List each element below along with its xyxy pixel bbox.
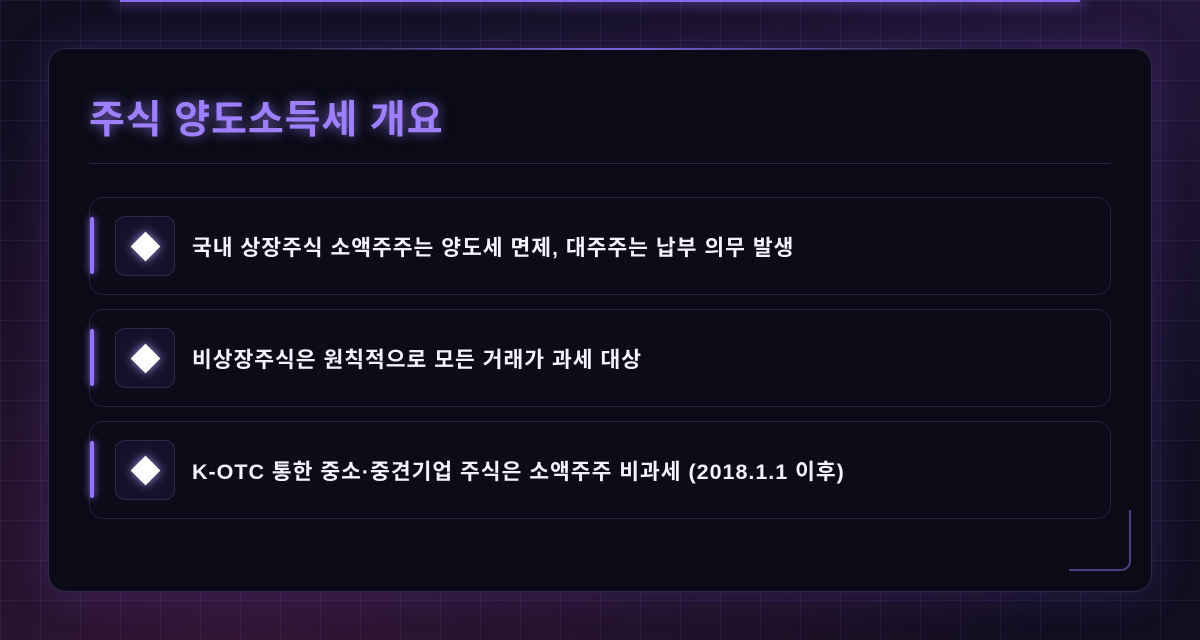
text 2: 비상장주식은 원칙적으로 모든 거래가 과세 대상 — [192, 348, 642, 372]
title: 주식 양도소득세 개요 — [89, 99, 444, 142]
panel: main card — [48, 48, 1152, 592]
text 3: K-OTC 통한 중소·중견기업 주식은 소액주주 비과세 (2018.1.1 이후) — [192, 460, 845, 484]
text 1: 국내 상장주식 소액주주는 양도세 면제, 대주주는 납부 의무 발생 — [192, 236, 794, 260]
item 1 — [89, 197, 1111, 295]
icon: diamond — [115, 328, 175, 388]
item 3 — [89, 421, 1111, 519]
corner bracket — [1069, 510, 1131, 571]
icon: diamond — [115, 216, 175, 276]
icon: diamond — [115, 440, 175, 500]
item 2 — [89, 309, 1111, 407]
